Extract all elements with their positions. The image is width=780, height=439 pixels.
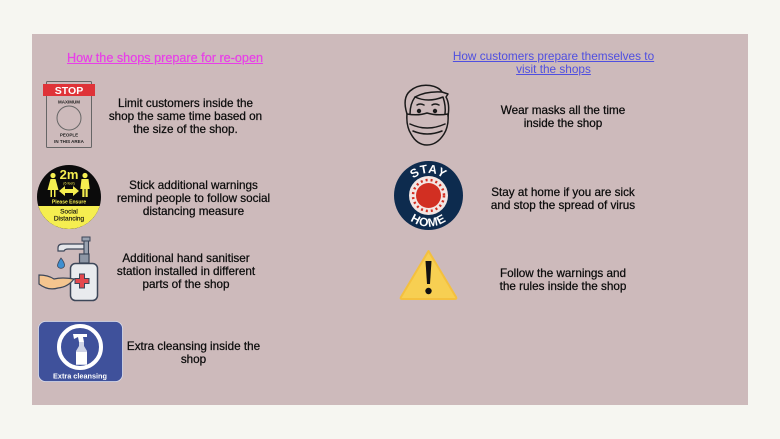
icon: stop maximum people sign [43, 81, 95, 148]
text: extra cleansing [127, 340, 260, 366]
icon: warning triangle [400, 250, 458, 300]
icon: social distancing sticker [37, 165, 101, 229]
text: stay at home: Stay at home if you are sick [491, 186, 635, 199]
text: hand sanitiser station: station installed in different [117, 264, 255, 278]
icon: face with mask [404, 84, 450, 146]
text: stay at home [491, 186, 635, 212]
text: hand sanitiser station [117, 252, 256, 291]
text: wear masks: inside the shop [524, 117, 602, 130]
text: additional warnings: distancing measure [143, 205, 244, 218]
icon: social distancing sticker: 2m [60, 167, 78, 182]
heading: how the shops prepare: How the shops prepare for re-open [67, 50, 263, 64]
icon: social distancing sticker: Distancing [54, 216, 85, 222]
text: limit customers: the size of the shop. [133, 123, 238, 136]
icon: social distancing sticker: (6 feet) [63, 182, 75, 186]
icon: social distancing sticker: Please Ensure [52, 200, 86, 206]
text: extra cleansing: Extra cleansing inside the [127, 340, 260, 353]
text: follow warnings: the rules inside the shop [500, 280, 626, 293]
panel: background [32, 34, 748, 405]
text: hand sanitiser station: parts of the shop [142, 278, 230, 290]
text: follow warnings [500, 267, 626, 293]
heading: how customers prepare [452, 49, 654, 76]
icon: social distancing sticker: Social [60, 208, 78, 216]
text: limit customers: Limit customers inside the [118, 97, 253, 110]
text: limit customers [109, 97, 262, 136]
text: stay at home: and stop the spread of virus [491, 199, 635, 212]
text: wear masks [500, 104, 625, 130]
icon: stop maximum people sign: PEOPLE [60, 132, 78, 138]
text: additional warnings: remind people to follow social [117, 192, 270, 205]
text: additional warnings: Stick additional warnings [129, 179, 258, 192]
icon: extra cleansing sign [38, 321, 123, 382]
text: limit customers: shop the same time based on [109, 110, 262, 123]
icon: stay home badge: STAY [410, 164, 448, 178]
icon: stop maximum people sign: STOP [55, 85, 83, 97]
text: hand sanitiser station: Additional hand sanitiser [122, 252, 250, 264]
icon: stop maximum people sign: IN THIS AREA [54, 139, 85, 144]
heading: how customers prepare: How customers prepare themselves to [453, 49, 654, 63]
icon: extra cleansing sign: Extra cleansing [53, 372, 107, 380]
text: extra cleansing: shop [181, 353, 206, 366]
text: additional warnings [117, 179, 270, 218]
text: wear masks: Wear masks all the time [501, 104, 625, 117]
icon: stay home badge [394, 161, 463, 230]
heading: how customers prepare: visit the shops [516, 62, 591, 76]
icon: stop maximum people sign: MAXIMUM [58, 100, 80, 104]
icon: hand sanitiser [38, 236, 98, 302]
icon: stay home badge: HOME [410, 214, 446, 227]
text: follow warnings: Follow the warnings and [500, 267, 626, 280]
